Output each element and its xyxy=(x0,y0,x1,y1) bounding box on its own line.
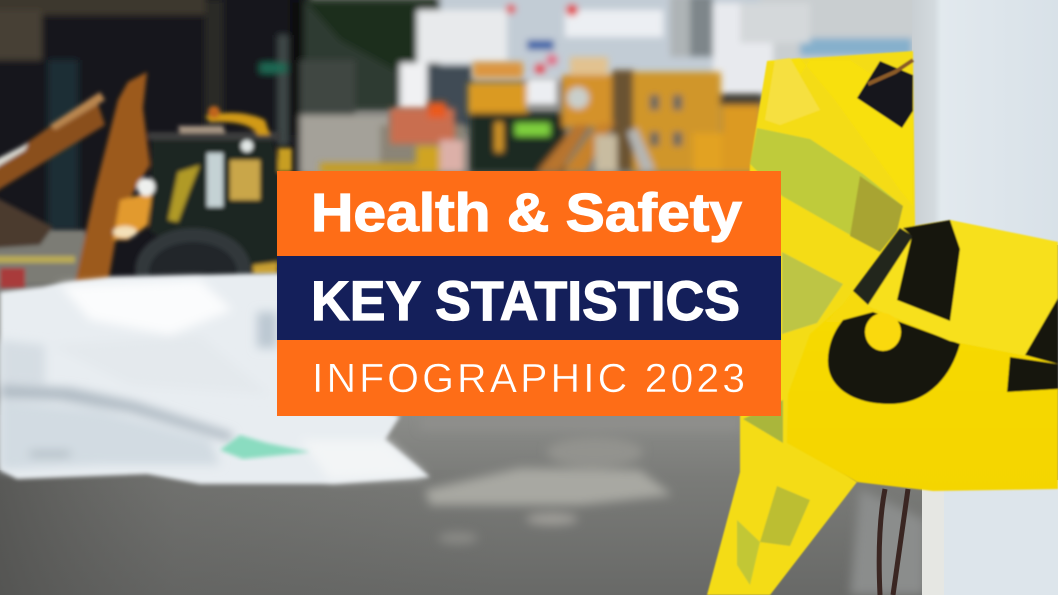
road surface xyxy=(0,415,930,595)
yellow caution tape, loose hanging part xyxy=(707,51,915,595)
black letter on lower fold xyxy=(828,312,960,404)
white tarp xyxy=(0,273,430,484)
distant orange machinery xyxy=(320,57,762,173)
yellow caution tape wrapped on pole xyxy=(787,220,1058,491)
white pole xyxy=(912,0,1058,595)
title block xyxy=(277,171,781,416)
backhoe xyxy=(0,72,292,312)
heading band: Infographic 2023 xyxy=(277,340,781,416)
heading band: Health & Safety xyxy=(277,171,781,256)
black cables xyxy=(879,489,908,595)
heading band: Infographic 2023: INFOGRAPHIC 2023 xyxy=(312,355,745,401)
heading band: Key Statistics: KEY STATISTICS xyxy=(311,269,740,332)
heading band: Key Statistics xyxy=(277,256,781,340)
dark building, trees, sky and site backdrop xyxy=(0,0,920,280)
heading band: Health & Safety: Health & Safety xyxy=(311,183,742,243)
upper fold of tape xyxy=(853,220,1058,362)
